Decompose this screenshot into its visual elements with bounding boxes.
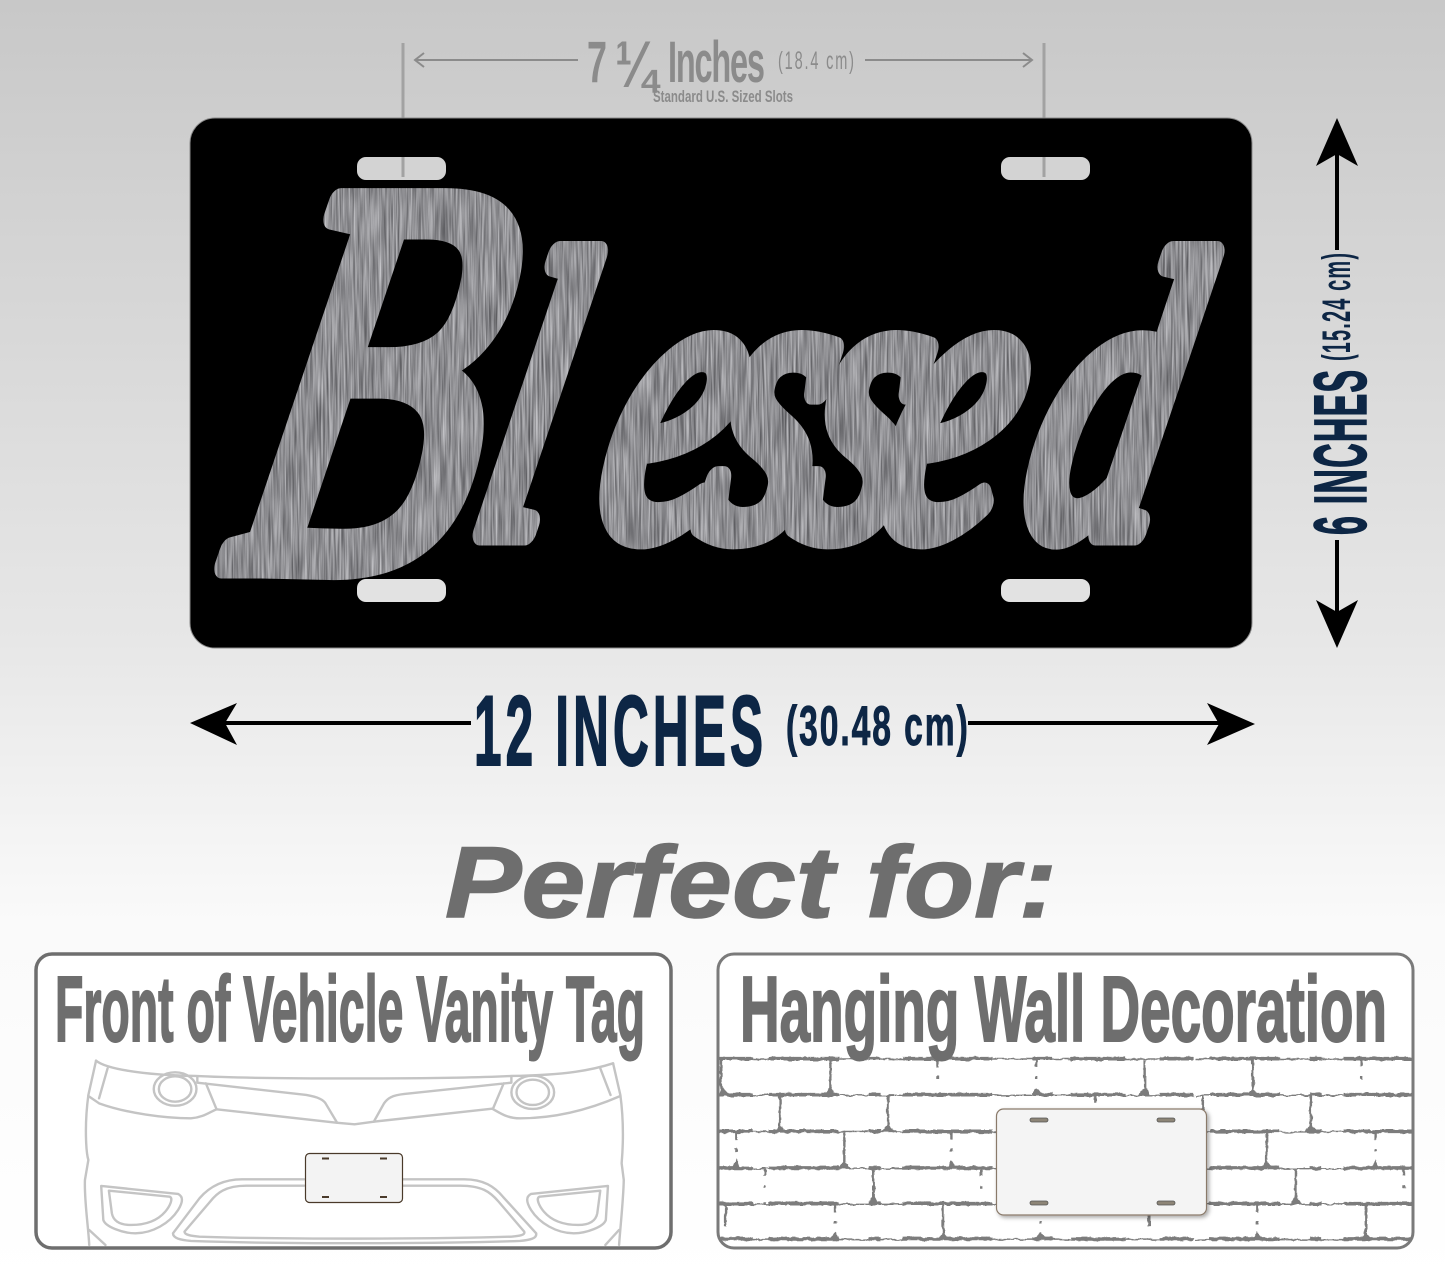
dimension: plate width: (30.48 cm)	[786, 694, 968, 757]
dimension: plate height: 6 INCHES	[1300, 370, 1383, 535]
brick wall	[719, 1059, 1412, 1240]
panel border	[36, 954, 671, 1248]
brushed metal script: Blessed: lessed	[449, 176, 1235, 619]
dimension: plate width	[190, 675, 1255, 787]
dimension: slot spacing	[415, 27, 1032, 106]
wall-mounted plate	[996, 1109, 1206, 1215]
dimension: slot spacing: Standard U.S. Sized Slots	[653, 87, 793, 106]
brushed metal script: Blessed: B	[195, 72, 563, 686]
slot spacing guide lines	[403, 43, 1044, 120]
brushed metal script: Blessed	[195, 72, 1257, 686]
heading: Perfect for: Perfect for:	[445, 827, 1057, 939]
panel: hanging wall decoration	[718, 954, 1413, 1248]
mini plate on bumper	[306, 1154, 402, 1202]
dimension: plate height	[1300, 118, 1383, 648]
dimension: plate width: 12 INCHES	[474, 675, 763, 787]
dimension: slot spacing: ¼	[615, 27, 661, 101]
panel: front of vehicle vanity tag: Front of Vehicle Vanity Tag	[55, 957, 645, 1061]
mounting slots	[357, 157, 1090, 602]
car front line drawing	[85, 1061, 624, 1245]
dimension: plate height: (15.24 cm)	[1313, 253, 1359, 361]
dimension: slot spacing: Inches	[668, 29, 765, 94]
license plate	[190, 72, 1257, 686]
dimension: slot spacing: 7	[587, 30, 607, 95]
panel border	[718, 954, 1413, 1248]
dimension: slot spacing: (18.4 cm)	[778, 48, 854, 75]
panel: front of vehicle vanity tag	[36, 954, 671, 1248]
